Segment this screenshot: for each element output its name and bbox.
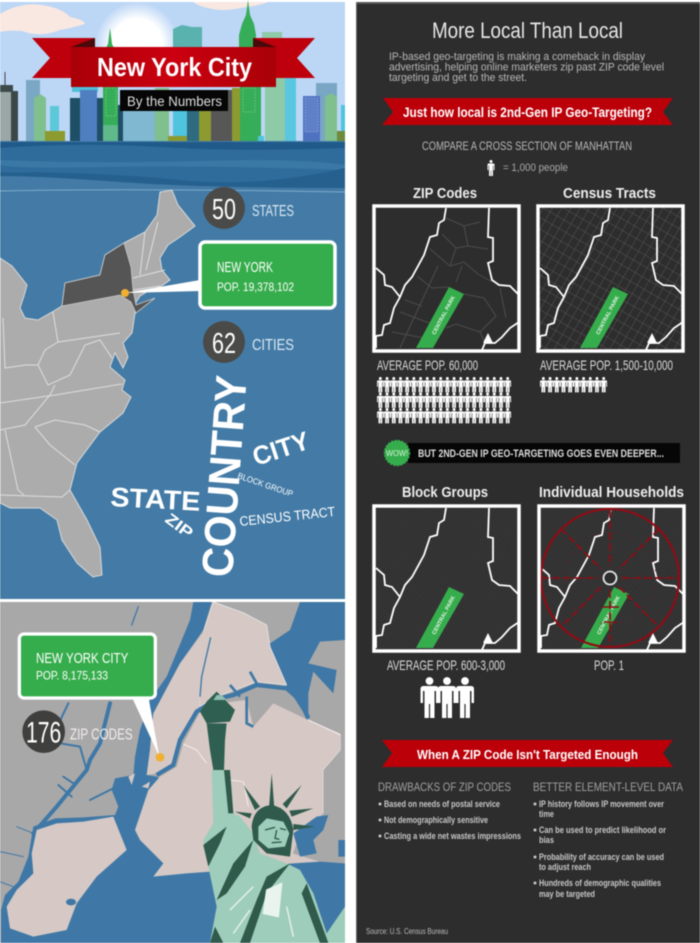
land: Bronx and Westchester bbox=[197, 602, 287, 707]
icon: Statue of Liberty bbox=[200, 692, 345, 943]
callout: New York bbox=[200, 242, 335, 308]
word cloud: ZIP bbox=[162, 511, 196, 542]
heading: More Local Than Local: More Local Than Local bbox=[432, 18, 623, 43]
column: better element-level data: IP history follows IP movement over bbox=[539, 799, 664, 809]
stat: 176 ZIP codes: 176 bbox=[26, 717, 61, 750]
water: Hudson, bays and ocean bbox=[1, 602, 345, 943]
callout pointer: New York bbox=[125, 280, 200, 293]
pictogram: block group population bbox=[420, 677, 474, 718]
subtitle: By the Numbers bbox=[127, 93, 222, 109]
New York state bbox=[62, 243, 155, 313]
column: better element-level data bbox=[533, 780, 683, 899]
column: better element-level data: to adjust reach bbox=[539, 862, 591, 872]
water: Jamaica Bay bbox=[293, 815, 328, 857]
word cloud: BLOCK GROUP bbox=[236, 470, 295, 499]
map: block groups: CENTRAL PARK bbox=[431, 595, 457, 636]
column: better element-level data: time bbox=[539, 809, 554, 819]
column: drawbacks of ZIP codes: Based on needs of postal service bbox=[384, 799, 500, 809]
column: better element-level data: may be targeted bbox=[539, 889, 595, 899]
land: gray east of Queens bbox=[293, 733, 345, 863]
heading: Individual Households: Individual Households bbox=[539, 485, 684, 501]
ribbon: When a ZIP code isn't targeted enough bbox=[382, 740, 673, 767]
word cloud: CITY bbox=[249, 425, 313, 472]
pictogram: census tract population bbox=[540, 377, 607, 392]
stat: 50 states bbox=[203, 187, 294, 229]
icon: sun bbox=[95, 2, 179, 86]
water: Long Island Sound bbox=[270, 602, 345, 720]
panel: skyline header bbox=[0, 0, 345, 144]
word cloud: STATE bbox=[110, 482, 201, 517]
banner: title ribbon bbox=[32, 38, 315, 87]
callout: New York: POP. 19,378,102 bbox=[217, 280, 294, 294]
map: ZIP codes: CENTRAL PARK bbox=[431, 295, 457, 336]
label: average population block group: AVERAGE POP. 600-3,000 bbox=[387, 657, 505, 673]
stat: 50 states: 50 bbox=[212, 194, 236, 226]
legend: person equals 1,000 people bbox=[488, 160, 568, 176]
stat: 62 cities: 62 bbox=[212, 328, 236, 360]
land: Brooklyn and Queens bbox=[135, 700, 340, 877]
source note: Source: U.S. Census Bureau bbox=[366, 927, 448, 936]
panel: New York City map bbox=[0, 602, 345, 943]
ribbon: When a ZIP code isn't targeted enough: When A ZIP Code Isn't Targeted Enough bbox=[417, 747, 638, 762]
icon: WOW badge bbox=[384, 440, 410, 466]
column: better element-level data: Hundreds of demographic qualities bbox=[539, 878, 661, 888]
map: ZIP codes bbox=[374, 206, 519, 351]
text: intro paragraph: targeting and get to the street. bbox=[389, 72, 527, 84]
land: Staten Island bbox=[7, 817, 127, 937]
heading: Block Groups: Block Groups bbox=[402, 485, 488, 501]
callout: New York City bbox=[19, 634, 155, 698]
callout: goes even deeper bbox=[384, 440, 680, 466]
text: intro paragraph bbox=[389, 51, 664, 84]
word cloud: COUNTRY bbox=[193, 374, 257, 579]
icon: New York City marker bbox=[156, 753, 164, 762]
column: drawbacks of ZIP codes bbox=[378, 780, 521, 841]
icon: New York marker bbox=[121, 289, 129, 297]
text: intro paragraph: advertising, helping online marketers zip past ZIP code level bbox=[389, 62, 664, 74]
land: bay islands bbox=[128, 773, 150, 788]
stat: 176 ZIP codes: ZIP CODES bbox=[70, 726, 133, 743]
legend: person equals 1,000 people: = 1,000 people bbox=[503, 162, 568, 174]
icon: target center bbox=[604, 572, 616, 584]
map: individual households: CENTRAL PARK bbox=[596, 595, 622, 636]
title: New York City bbox=[97, 52, 252, 82]
east coast land bbox=[0, 190, 195, 577]
heading: ZIP Codes: ZIP Codes bbox=[413, 186, 477, 202]
ribbon: Just how local bbox=[382, 98, 673, 125]
column: drawbacks of ZIP codes: Not demographically sensitive bbox=[384, 815, 488, 825]
stat: 50 states: STATES bbox=[252, 203, 294, 220]
callout: New York: NEW YORK bbox=[217, 259, 273, 276]
word cloud: CENSUS TRACT bbox=[239, 504, 336, 529]
callout pointer: New York City bbox=[132, 697, 159, 757]
map: census tracts: CENTRAL PARK bbox=[595, 295, 621, 336]
skyline buildings bbox=[0, 0, 345, 141]
stat: 62 cities: CITIES bbox=[252, 337, 294, 354]
panel: right dark column bbox=[356, 2, 700, 943]
label: population 1: POP. 1 bbox=[594, 657, 624, 673]
panel: water and east coast map bbox=[0, 141, 345, 599]
column: better element-level data: bias bbox=[539, 835, 554, 845]
label: average population ZIP: AVERAGE POP. 60,000 bbox=[377, 357, 478, 373]
land: Manhattan bbox=[147, 632, 213, 775]
heading: Census Tracts: Census Tracts bbox=[563, 186, 656, 202]
column: drawbacks of ZIP codes: Casting a wide net wastes impressions bbox=[384, 831, 521, 841]
map: census tracts bbox=[538, 206, 683, 351]
callout: New York City: NEW YORK CITY bbox=[36, 650, 128, 667]
text: intro paragraph: IP-based geo-targeting is making a comeback in display bbox=[389, 51, 645, 63]
column: better element-level data: Probability of accuracy can be used bbox=[539, 852, 664, 862]
stat: 176 ZIP codes bbox=[22, 710, 133, 753]
word cloud bbox=[110, 374, 336, 579]
target radar bbox=[541, 509, 679, 647]
map: block groups bbox=[374, 506, 519, 651]
callout: New York City: POP. 8,175,133 bbox=[36, 668, 108, 682]
icon: top cloud bbox=[193, 2, 268, 10]
water: New Jersey rivers bbox=[0, 607, 138, 887]
water: East River bbox=[157, 685, 308, 775]
map: individual households bbox=[539, 506, 684, 651]
state borders bbox=[0, 222, 165, 497]
pictogram: ZIP population bbox=[377, 377, 511, 423]
ribbon: Just how local: Just how local is 2nd-Gen IP Geo-Targeting? bbox=[403, 105, 652, 120]
column: drawbacks of ZIP codes: DRAWBACKS OF ZIP CODES bbox=[378, 780, 511, 794]
text: compare cross section: COMPARE A CROSS SECTION OF MANHATTAN bbox=[422, 141, 632, 153]
icon: left cloud bbox=[0, 4, 85, 34]
column: better element-level data: Can be used to predict likelihood or bbox=[539, 825, 666, 835]
icon: WOW badge: WOW! bbox=[386, 449, 408, 458]
stat: 62 cities bbox=[203, 321, 294, 363]
